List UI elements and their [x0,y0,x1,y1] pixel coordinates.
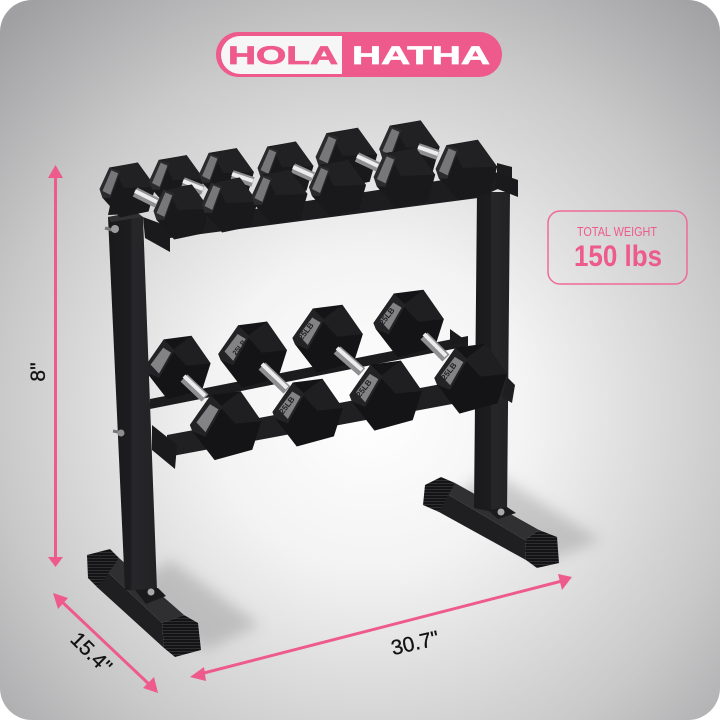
depth dimension arrow [53,593,158,693]
logo: Hola Hatha: HOLA [228,42,338,70]
logo: Hola Hatha [216,32,502,77]
right post [474,192,510,515]
upper rack rail [143,163,518,252]
right foot bolt [488,507,516,519]
lower rack front rail [152,377,515,469]
upper rack dumbbell handles [135,147,438,203]
lower rack front dumbbell heads: 25LB [354,378,374,399]
upper rack front dumbbell heads [154,140,497,239]
lower rack front dumbbell heads: 25LB [277,395,297,416]
lower rack back dumbbell heads: 25LB [377,306,397,327]
callout: total weight: 150 lbs [574,240,662,273]
lower rack back dumbbell heads: 25LB [296,321,316,342]
width dimension arrow [190,574,572,681]
left foot [87,549,201,657]
width label: 30.7" [389,627,441,660]
upper rack back dumbbell heads [100,120,440,217]
floor shadows [130,470,600,650]
lower rack back dumbbell heads: 25LB [232,339,248,357]
height dimension arrow [48,165,63,567]
upper rack back-left plate [108,196,130,215]
callout: total weight [548,211,687,284]
lower rack back dumbbell heads [145,290,444,399]
lower rack dumbbell handles [184,334,446,398]
lower rack back rail [150,329,468,409]
left foot bolt [135,588,166,604]
callout: total weight: TOTAL WEIGHT [577,224,657,239]
depth label: 15.4" [66,628,116,678]
lower rack front dumbbell heads: 25LB [439,361,459,382]
height label: 8" [27,362,50,382]
right foot [423,477,559,568]
left post [105,212,157,590]
logo: Hola Hatha: HATHA [352,42,490,70]
lower rack front dumbbell heads [190,344,507,460]
